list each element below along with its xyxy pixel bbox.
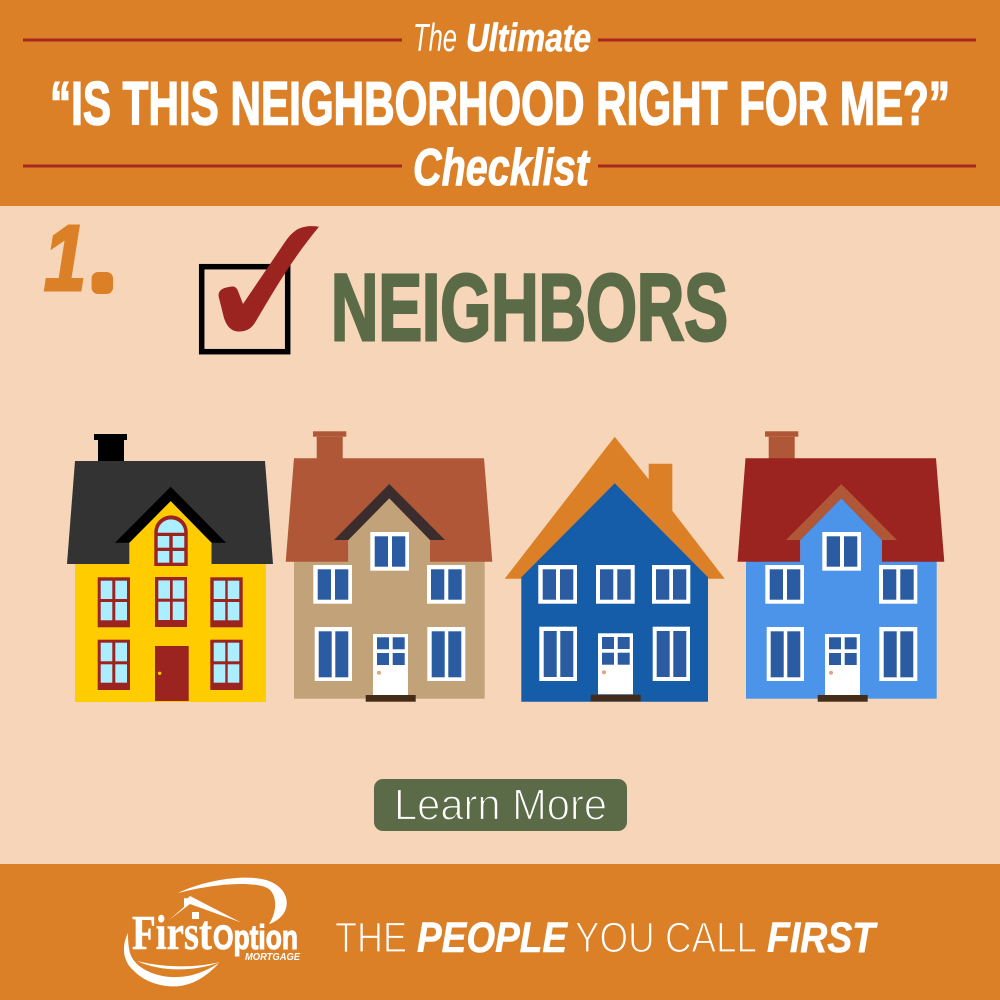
step number: 1 — [44, 206, 86, 310]
logo: First Option Mortgage: Option — [213, 919, 298, 957]
tagline: THE — [335, 914, 407, 962]
house: tan — [286, 431, 492, 702]
logo: First Option Mortgage: First — [132, 905, 213, 960]
house: yellow — [67, 434, 273, 702]
title line: Checklist: Checklist — [413, 139, 591, 197]
logo: First Option Mortgage — [124, 878, 301, 986]
tagline: FIRST — [767, 914, 878, 962]
house: light blue — [738, 431, 944, 702]
button: Learn More: Learn More — [394, 780, 607, 830]
tagline: PEOPLE — [417, 914, 568, 962]
step number: . — [94, 234, 111, 300]
header banner — [0, 0, 1000, 206]
logo: First Option Mortgage: MORTGAGE — [245, 951, 301, 963]
title line: The Ultimate: The — [413, 17, 457, 60]
tagline: YOU CALL — [575, 914, 757, 962]
icon: checked box — [202, 226, 319, 352]
title line: The Ultimate — [413, 17, 591, 60]
title line: The Ultimate: Ultimate — [466, 17, 591, 60]
footer banner — [0, 864, 1000, 1000]
house: dark blue — [505, 437, 725, 702]
tagline — [335, 914, 878, 962]
heading: Neighbors: NEIGHBORS — [331, 255, 728, 361]
